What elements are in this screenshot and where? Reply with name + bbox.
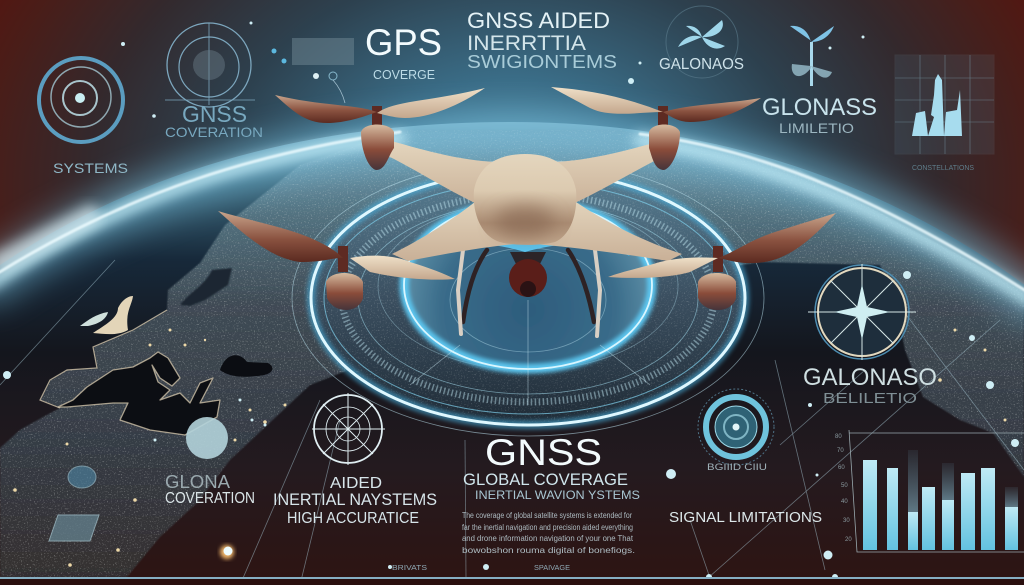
small captions: CONSTELLATIONS [912,165,974,172]
label: galonaso beliletio: GALONASO [803,364,937,391]
front left motor [326,246,363,310]
label: gnss coveration [165,101,263,140]
bar chart: 50 [841,483,848,489]
drone [218,87,836,336]
heading: gnss aided inertial [467,8,617,72]
label: gps coverge [365,22,442,82]
body shading [495,206,555,238]
great britain [93,296,133,334]
heading: gnss global coverage: GNSS [485,432,602,473]
label: signal limitations: SIGNAL LIMITATIONS [669,509,822,526]
paragraph text: far the inertial navigation and precision aided everything [462,523,633,532]
drone body [474,154,576,245]
paragraph text: The coverage of global satellite systems is extended for [462,511,632,520]
heading: gnss global coverage [463,432,640,502]
icon: white radar [312,393,385,465]
heading: gnss aided inertial: INERRTTIA [467,32,586,55]
pale sphere marker [186,417,228,459]
front arms [392,198,682,261]
small captions [392,165,974,572]
label: glona coveration: GLONA [165,472,230,492]
paragraph text: bowobshon rouma digital of bonefiogs. [462,546,635,555]
mediterranean sea [58,352,220,435]
status panel [272,38,354,103]
paragraph text: and drone information navigation of your one That [462,534,634,543]
label: aided inertial high accuracy: INERTIAL NAYSTEMS [273,490,437,509]
label: galonaso beliletio [803,364,937,407]
bar chart: 70 [837,448,844,454]
label: aided inertial high accuracy [273,475,437,527]
heading: gnss global coverage: GLOBAL COVERAGE [463,470,628,489]
top-right mini chart [895,55,994,154]
bar chart: 30 [843,518,850,524]
network lines [0,260,1024,585]
icon: concentric signal rings [39,58,123,142]
camera gimbal [509,252,547,297]
label: gps coverge: GPS [365,22,442,63]
front right propeller [608,213,836,278]
icon: compass star [808,264,916,360]
rear arms [388,140,664,208]
heading: gnss global coverage: INERTIAL WAVION YSTEMS [475,490,640,502]
holographic ring platform [292,160,764,436]
north african map icon [68,466,96,488]
icon: teal target ring [698,389,774,465]
label: glonass limiletio: LIMILETIO [779,120,854,136]
bar chart: 60 [838,465,845,471]
icon: windmill satellite [790,26,834,86]
bar chart: 40 [841,499,848,505]
icon: four-petal satellite [666,6,738,78]
label: aided inertial high accuracy: HIGH ACCURATICE [287,510,419,527]
small captions: SPAIVAGE [534,565,570,572]
horizon glow arc [0,132,1024,302]
rear left propeller [275,88,485,123]
heading: gnss aided inertial: GNSS AIDED [467,8,610,33]
belly glow [430,232,630,256]
paragraph text [462,511,635,555]
heading: gnss aided inertial: SWIGIONTEMS [467,52,617,72]
label: galonaso beliletio: BELILETIO [823,390,917,407]
label: aided inertial high accuracy: AIDED [330,475,382,492]
glowing dot [220,545,234,559]
label: systems: SYSTEMS [53,160,128,176]
small captions: BGIIID CIIU [707,462,767,472]
icon: radar coverage [165,23,255,107]
atlantic coast [40,310,167,408]
city lights [13,328,1006,567]
label: glonass limiletio: GLONASS [762,94,877,121]
landing legs [458,250,600,336]
bottom strip [0,577,1024,585]
hatched map label [49,515,99,541]
front right motor [698,246,736,310]
front left propeller [218,211,455,280]
ireland [80,312,108,326]
rear right motor [649,106,680,170]
label: glona coveration: COVERATION [165,490,255,507]
bar chart: 20 [845,537,852,543]
bar chart [835,430,1024,552]
small captions: BRIVATS [392,565,427,572]
black sea [220,355,272,377]
label: gnss coveration: GNSS [182,101,247,127]
map: europe and africa land mass [0,130,1024,577]
rear left motor [361,106,394,170]
label: gps coverge: COVERGE [373,68,435,82]
label: galonaos: GALONAOS [659,56,744,73]
earth globe [0,122,1024,585]
label: glonass limiletio [762,94,877,136]
label: gnss coveration: COVERATION [165,124,263,140]
baltic sea [180,268,232,306]
rear right propeller [551,87,761,122]
bar chart: 80 [835,434,842,440]
label: glona coveration [165,472,255,507]
